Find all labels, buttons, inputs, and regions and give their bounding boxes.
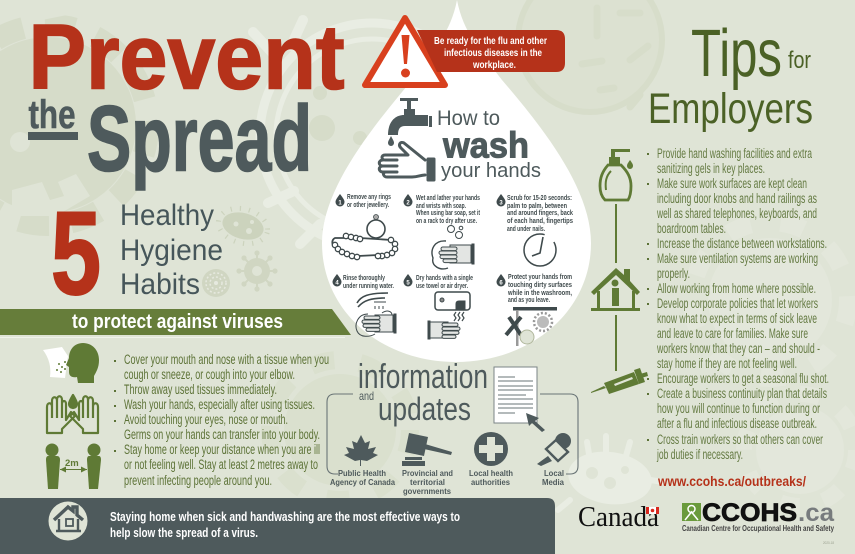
icon: coronavirus — [236, 250, 278, 292]
icon: soap dispenser — [600, 149, 633, 200]
labels: information sources: Public Health — [338, 468, 386, 478]
step 2: wet and lather: on a rack to dry after use. — [416, 216, 477, 225]
icon: warning triangle — [365, 18, 445, 85]
list: healthy hygiene habits: Throw away used tissues immediately. — [124, 382, 277, 397]
icon: washing hands — [47, 395, 98, 433]
list: healthy hygiene habits: or not feeling well. Stay at least 2 metres away to — [124, 457, 318, 472]
step 3: scrub: and around fingers, back — [507, 208, 574, 217]
big number 5: 5 — [51, 188, 101, 320]
icon: ring and bracelet — [332, 214, 398, 260]
labels: information sources: authorities — [471, 477, 510, 487]
heading: How to wash your hands — [437, 107, 541, 182]
step 1: remove rings: 1 — [338, 200, 342, 206]
list: healthy hygiene habits: Wash your hands, especially after using tissues. — [124, 397, 315, 412]
footer bar — [0, 498, 555, 554]
callout: be ready: Be ready for the flu and other — [434, 36, 547, 47]
step 2: wet and lather: and wrists with soap. — [416, 201, 466, 210]
icon: crossed door handle and germs — [506, 307, 557, 346]
labels: information sources: Provincial and — [402, 468, 453, 478]
list: healthy hygiene habits: Avoid touching your eyes, nose or mouth. — [124, 412, 288, 427]
list: tips for employers: boardroom tables. — [657, 221, 726, 236]
step 2: wet and lather: Wet and lather your hands — [416, 193, 480, 202]
icon: person in house — [591, 268, 640, 311]
step 3: scrub: of each hand, fingertips — [507, 216, 573, 225]
step 2: wet and lather: 2 — [406, 200, 410, 206]
connector line — [615, 315, 617, 371]
icon: document with cursor — [494, 367, 545, 432]
list: healthy hygiene habits — [114, 352, 329, 488]
step 6: protect: and as you leave. — [508, 295, 550, 304]
labels: information sources: Local — [544, 468, 564, 478]
callout: be ready: infectious diseases in the — [444, 48, 542, 59]
icon: two people two metres apart — [46, 444, 101, 489]
step 6: protect: while in the washroom, — [507, 288, 572, 297]
heading: Healthy Hygiene Habits — [120, 199, 223, 301]
heading: How to wash your hands: your hands — [441, 160, 541, 182]
step 2: wet and lather: When using bar soap, set it — [416, 208, 480, 217]
document code: 2020-18 — [823, 541, 834, 545]
title: Spread: Spread — [87, 86, 312, 190]
list: tips for employers: properly. — [657, 266, 690, 281]
logo: CCOHS: .ca — [798, 499, 835, 527]
labels: information sources: Media — [542, 477, 564, 487]
heading: How to wash your hands: wash — [442, 124, 529, 166]
labels: information sources: territorial — [410, 477, 445, 487]
background virus bottom right — [744, 394, 855, 506]
icon: hand dryer — [428, 292, 470, 339]
icon: syringe — [591, 368, 648, 394]
list: healthy hygiene habits: Stay home or keep your distance when you are ill — [124, 442, 320, 457]
callout: be ready: workplace. — [472, 60, 516, 71]
heading: How to wash your hands: How to — [437, 107, 500, 130]
heading: information and updates — [358, 358, 488, 427]
icon: microphone — [537, 433, 571, 466]
step 5: dry: 5 — [406, 280, 410, 286]
step 5: dry — [404, 273, 473, 339]
background virus lower right — [692, 222, 848, 378]
icon: hand under running water — [356, 293, 396, 336]
background bacterium centre left — [253, 20, 484, 247]
icon: medical cross — [474, 432, 508, 466]
icon: soapy hand — [432, 226, 474, 269]
step 6: protect: Protect your hands from — [508, 272, 572, 281]
labels: information sources: governments — [403, 486, 451, 496]
icon: gavel — [402, 433, 452, 466]
step 6: protect: touching dirty surfaces — [508, 280, 572, 289]
list: healthy hygiene habits: Germs on your hands can transfer into your body. — [124, 427, 320, 442]
icon: house in circle — [48, 502, 88, 540]
background virus bottom centre — [270, 360, 410, 500]
icon: maple leaf — [344, 435, 378, 466]
step 3: scrub: 3 — [499, 200, 503, 206]
background virus top left — [0, 4, 148, 225]
heading: Tips for Employers — [648, 16, 813, 133]
heading: information and updates: and — [359, 389, 374, 403]
icon: hand — [379, 142, 434, 180]
heading: Healthy Hygiene Habits: Habits — [120, 268, 200, 301]
icon: clock — [524, 234, 556, 266]
step 2: wet and lather — [404, 193, 480, 269]
step 5: dry: Dry hands with a single — [416, 273, 473, 282]
icon: tap — [388, 98, 432, 146]
title: Prevent: Prevent — [28, 6, 344, 108]
icon: two people two metres apart: 2m — [65, 458, 79, 469]
heading: Healthy Hygiene Habits: Healthy — [120, 199, 214, 232]
list: healthy hygiene habits: prevent infecting people around you. — [124, 473, 272, 488]
title: the: the — [28, 93, 76, 137]
heading: Healthy Hygiene Habits: Hygiene — [120, 234, 223, 267]
step 3: scrub: and under nails. — [507, 224, 545, 233]
connector line — [615, 204, 617, 263]
step 4: rinse: Rinse thoroughly — [343, 273, 386, 282]
list: tips for employers: job duties if necessary. — [656, 447, 743, 462]
logo: CCOHS — [682, 499, 835, 533]
heading: Tips for Employers: Tips — [691, 16, 782, 91]
background bacterium bottom — [558, 436, 664, 510]
banner: to protect against viruses: to protect against viruses — [72, 311, 283, 333]
logo: CCOHS: CCOHS — [702, 499, 797, 527]
list: healthy hygiene habits: Cover your mouth and nose with a tissue when you — [124, 352, 329, 367]
icon: person coughing into tissue — [43, 343, 99, 383]
step 4: rinse — [332, 273, 396, 336]
background bacteria top right — [518, 0, 662, 112]
info bracket — [327, 394, 578, 474]
logo: Canada wordmark: Canada — [578, 501, 659, 533]
icon: bacterium — [214, 203, 272, 249]
link: ccohs outbreaks url: www.ccohs.ca/outbreaks/ — [657, 473, 806, 489]
heading: Tips for Employers: for — [788, 47, 811, 74]
step 1: remove rings: Remove any rings — [347, 192, 391, 201]
labels: information sources: Agency of Canada — [330, 477, 395, 487]
list: tips for employers: sanitizing gels in key places. — [657, 161, 765, 176]
step 3: scrub — [496, 193, 574, 266]
banner: to protect against viruses — [0, 309, 351, 338]
list: tips for employers — [647, 146, 829, 462]
list: healthy hygiene habits: cough or sneeze, or cough into your elbow. — [124, 367, 295, 382]
step 5: dry: use towel or air dryer. — [416, 281, 468, 290]
footer bar: help slow the spread of a virus. — [110, 526, 258, 540]
icon: round germ — [202, 269, 230, 297]
footer bar: Staying home when sick and handwashing are the most effective ways to — [110, 510, 460, 524]
step 1: remove rings: or other jewellery. — [347, 200, 389, 209]
step 3: scrub: palm to palm, between — [507, 201, 567, 210]
step 6: protect: 6 — [499, 280, 503, 286]
heading: information and updates: updates — [378, 391, 471, 427]
heading: Tips for Employers: Employers — [648, 85, 813, 133]
step 4: rinse: under running water. — [343, 281, 394, 290]
labels: information sources — [330, 468, 564, 496]
step 4: rinse: 4 — [335, 280, 339, 286]
labels: information sources: Local health — [469, 468, 513, 478]
step 1: remove rings — [332, 192, 398, 260]
step 6: protect — [496, 272, 572, 346]
heading: information and updates: information — [358, 358, 488, 396]
step 3: scrub: Scrub for 15-20 seconds: — [507, 193, 572, 202]
white water drop — [322, 0, 591, 362]
callout: be ready — [417, 30, 565, 72]
